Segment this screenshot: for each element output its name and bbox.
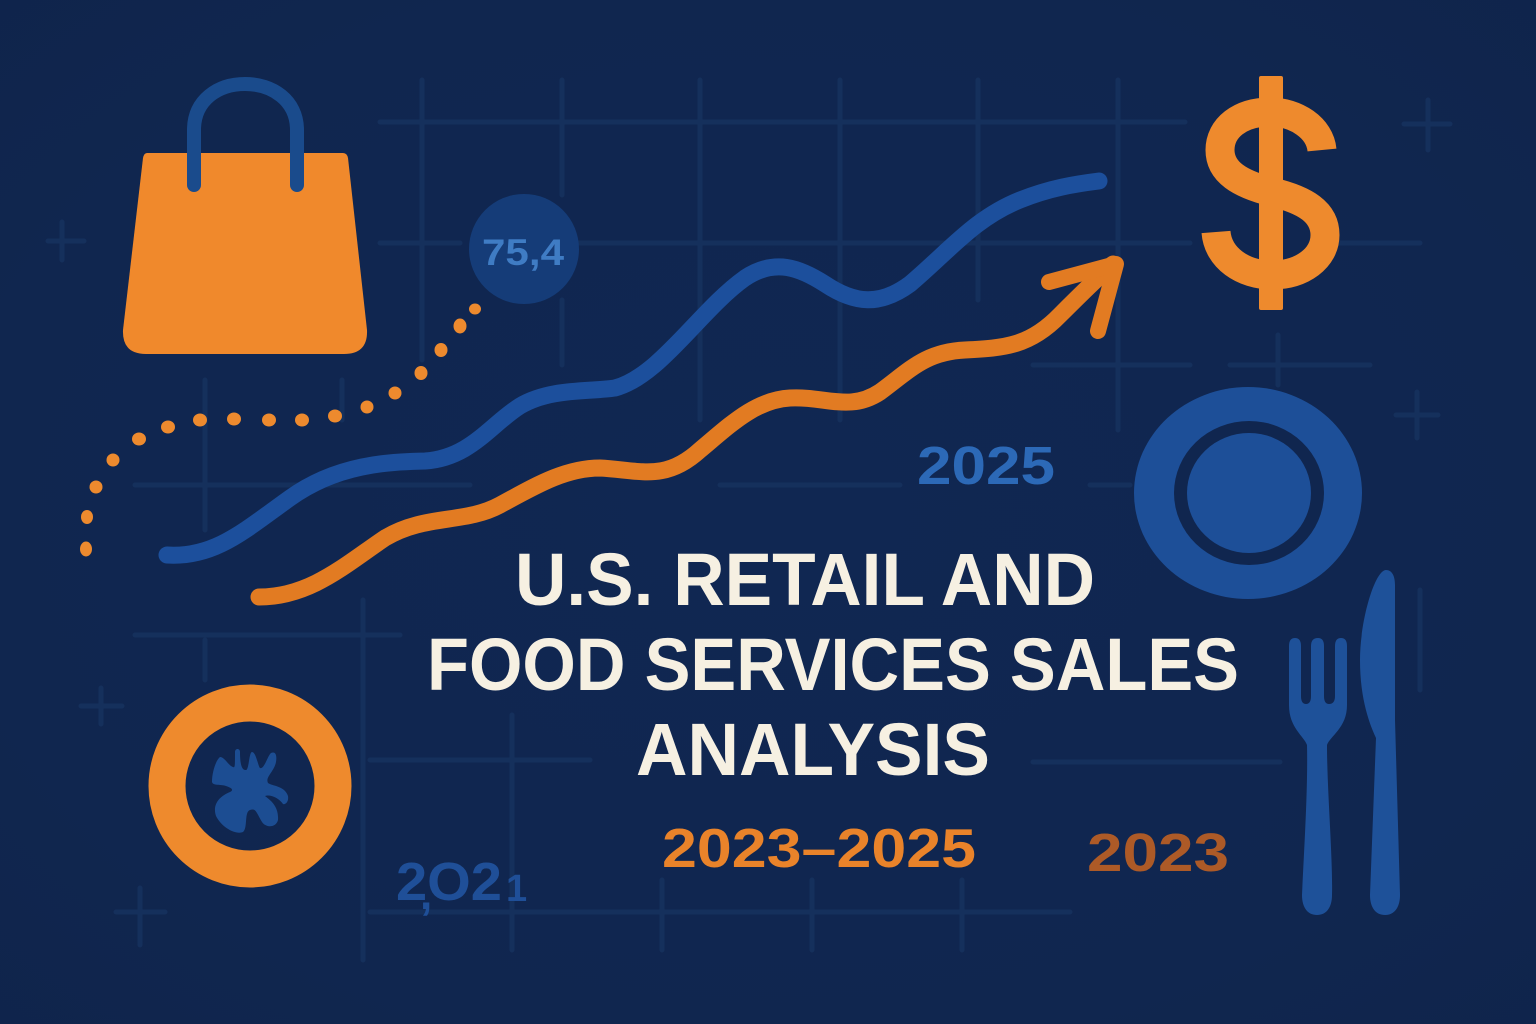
icon: shopping bag [123, 84, 367, 354]
year label: 2025: 2025 [917, 436, 1055, 496]
icon: knife [1360, 570, 1400, 915]
year label: 2021: , [420, 870, 432, 919]
title: U.S. RETAIL AND [515, 538, 1095, 621]
line chart: blue trend line [167, 181, 1099, 555]
icon: fork [1289, 638, 1347, 915]
year label: 2021: 1 [506, 868, 527, 910]
title: FOOD SERVICES SALES [427, 623, 1239, 706]
year label: 2021: 2O2 [396, 852, 502, 912]
year label: 2023: 2023 [1087, 823, 1229, 883]
icon: dollar sign [1216, 76, 1325, 310]
subtitle: date range: 2023–2025 [662, 817, 976, 879]
callout: value bubble [469, 194, 579, 304]
icon: orange ring with blob [167, 703, 333, 869]
title [427, 538, 1239, 791]
icon: blue blob [212, 749, 288, 833]
line chart: orange trend arrow [259, 264, 1116, 597]
callout: value bubble: 75,4 [482, 232, 564, 273]
year label: 2021 [396, 852, 527, 919]
dotted path [80, 304, 481, 556]
title: ANALYSIS [636, 708, 990, 791]
icon: plate [1134, 387, 1362, 599]
